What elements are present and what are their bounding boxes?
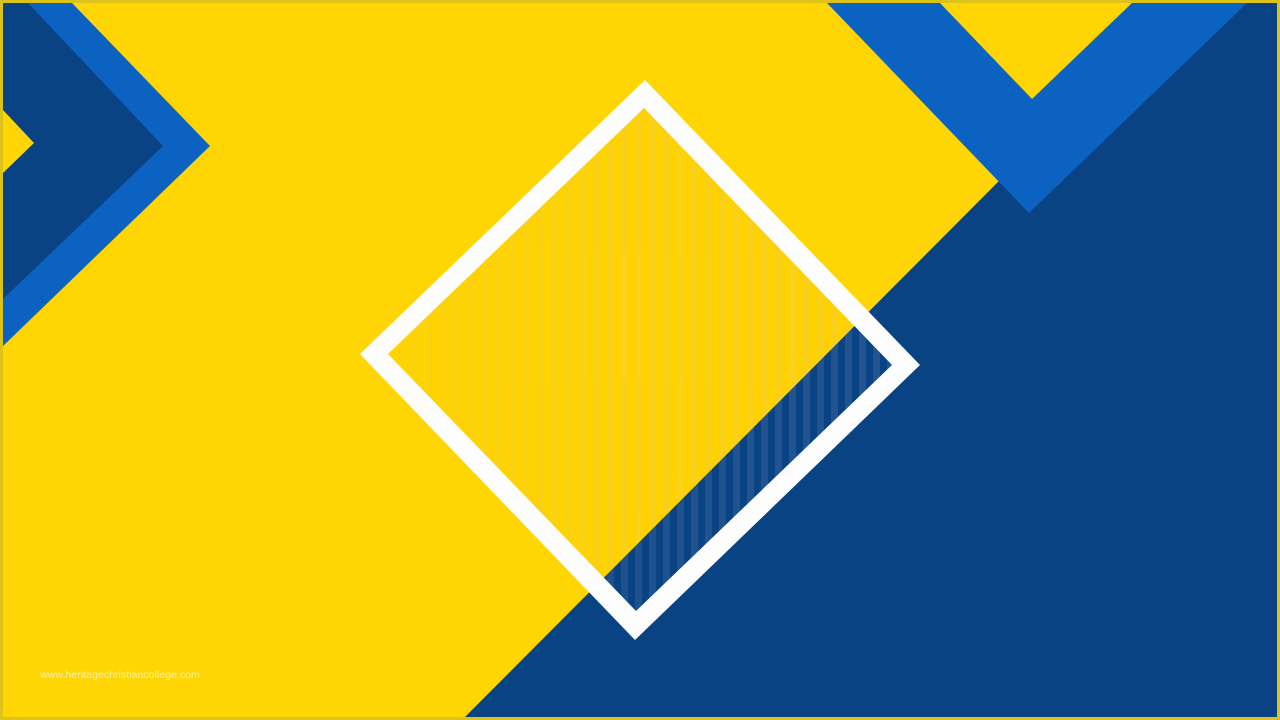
top-left yellow notch [0, 107, 34, 176]
top-left blue arrow [0, 0, 210, 349]
white diamond frame [360, 80, 920, 640]
striped diamond interior [425, 110, 892, 610]
navy diagonal panel [462, 0, 1280, 720]
website watermark text: www.heritagechristiancollege.com [39, 669, 200, 681]
top-right blue chevron [827, 3, 1247, 213]
top-left navy arrow [0, 0, 163, 302]
